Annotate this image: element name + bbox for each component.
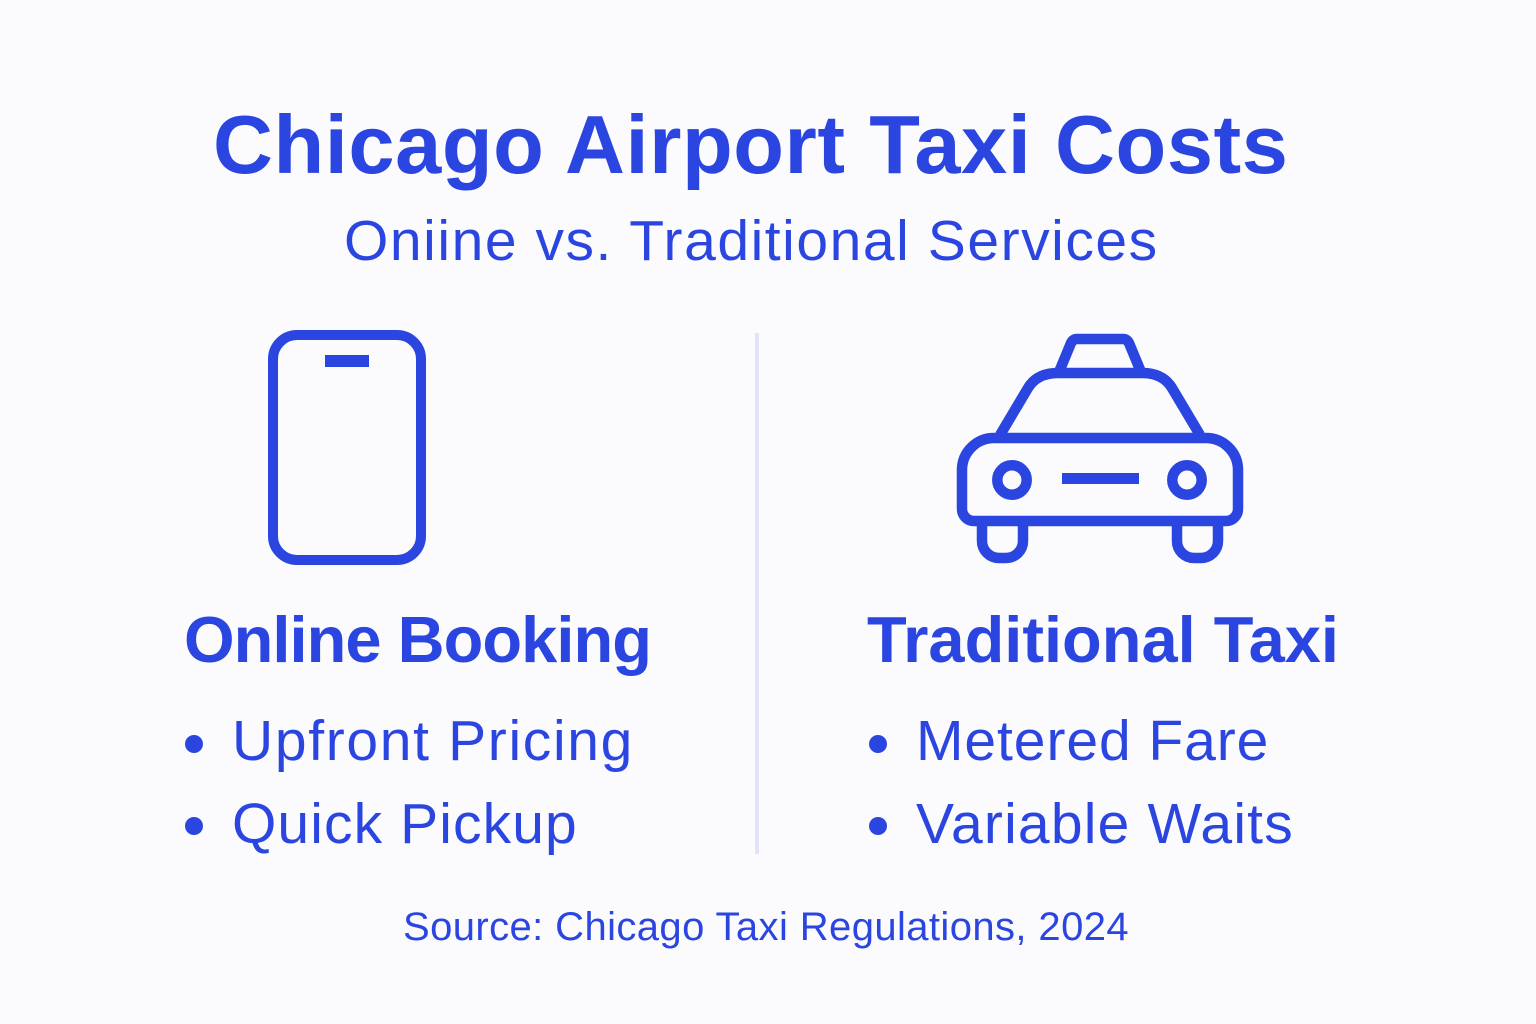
heading: online booking: Online Booking: [184, 603, 651, 676]
bullet list: online: [185, 709, 634, 856]
bullet dot: [869, 735, 887, 753]
bullet dot: [185, 817, 203, 835]
bullet item: upfront pricing: Upfront Pricing: [232, 709, 634, 773]
source note: Source: Chicago Taxi Regulations, 2024: [403, 905, 1129, 949]
bullet list: traditional: [869, 709, 1294, 856]
bullet item: variable waits: Variable Waits: [916, 792, 1294, 856]
divider: [755, 333, 759, 854]
subtitle: Oniine vs. Traditional Services: [344, 209, 1159, 273]
icon: taxi: [956, 334, 1244, 564]
bullet item: quick pickup: Quick Pickup: [232, 792, 578, 856]
bullet dot: [185, 735, 203, 753]
panel: online booking: [184, 330, 651, 856]
panel: traditional taxi: [867, 334, 1339, 856]
title: Chicago Airport Taxi Costs: [213, 98, 1289, 191]
icon: smartphone: [268, 330, 426, 565]
bullet item: metered fare: Metered Fare: [916, 709, 1269, 773]
heading: traditional taxi: Traditional Taxi: [867, 603, 1339, 676]
bullet dot: [869, 817, 887, 835]
